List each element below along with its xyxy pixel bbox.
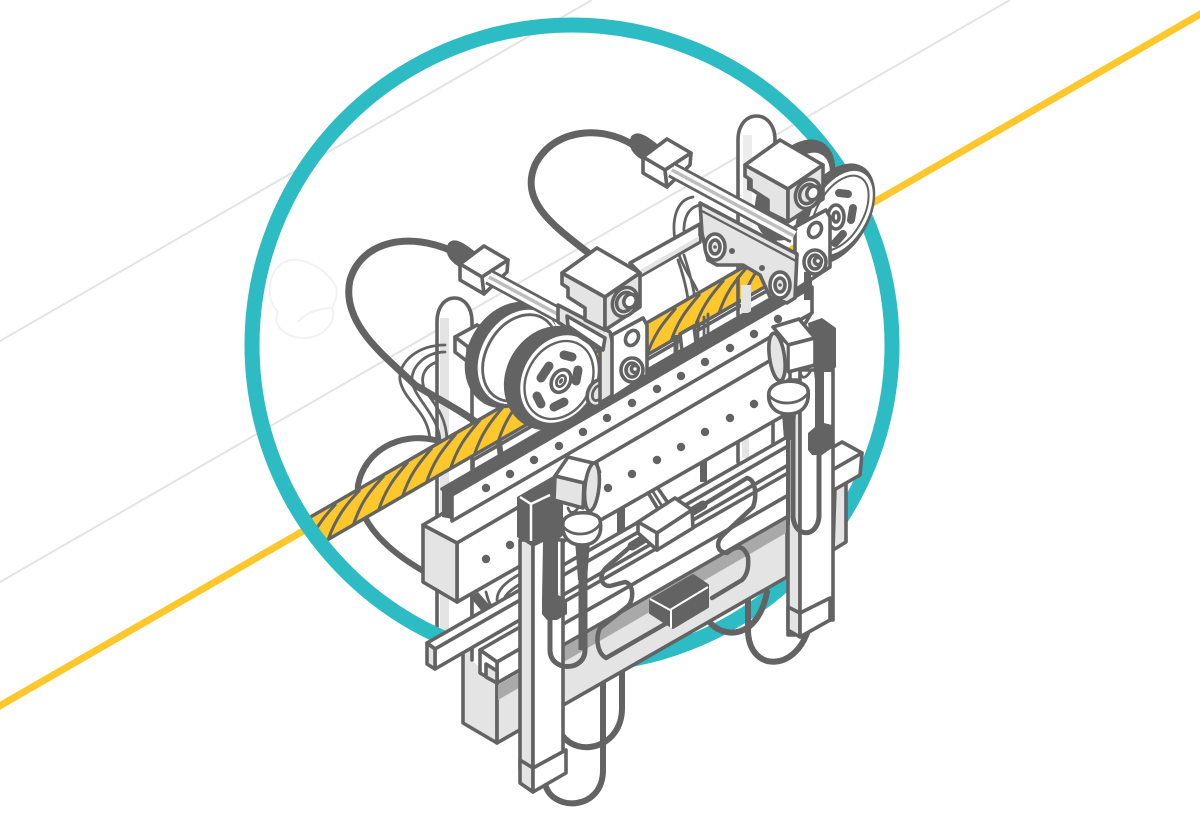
front bar: [427, 437, 795, 669]
module box: [638, 498, 693, 550]
dark box: [650, 575, 708, 628]
lower rail: [480, 442, 862, 683]
right rod over plate: [672, 170, 794, 236]
rear cable loops: [349, 133, 640, 572]
left connector and rod: [448, 241, 609, 342]
lower back panel and box: [463, 413, 846, 743]
right drop bar: [804, 272, 811, 300]
serpentine cable: [598, 478, 755, 658]
right sensor: [766, 319, 815, 440]
rope: [310, 266, 764, 542]
left sensor: [554, 457, 601, 580]
rear structure details: [470, 422, 773, 660]
right block with bolts: [745, 140, 830, 290]
background lines: [0, 0, 1010, 582]
left block with bolts: [562, 248, 647, 398]
left wheel: [446, 285, 619, 448]
teal circle: [252, 25, 892, 665]
right column: [788, 318, 836, 637]
left small roller: [583, 376, 613, 410]
faint blobs: [270, 260, 337, 338]
right wheel: [738, 125, 892, 279]
cross tube: [630, 224, 700, 275]
main block with holes: [423, 312, 812, 602]
lower cables: [545, 592, 808, 803]
rear posts: [437, 116, 775, 660]
right gray plate: [700, 203, 797, 303]
right connector and rod: [631, 134, 792, 235]
perforated rail: [442, 276, 812, 521]
left bracket strip: [558, 305, 613, 403]
left column: [517, 475, 585, 792]
wire bundles: [400, 197, 700, 440]
white band under rope: [442, 276, 810, 489]
left stub bracket: [455, 325, 490, 362]
